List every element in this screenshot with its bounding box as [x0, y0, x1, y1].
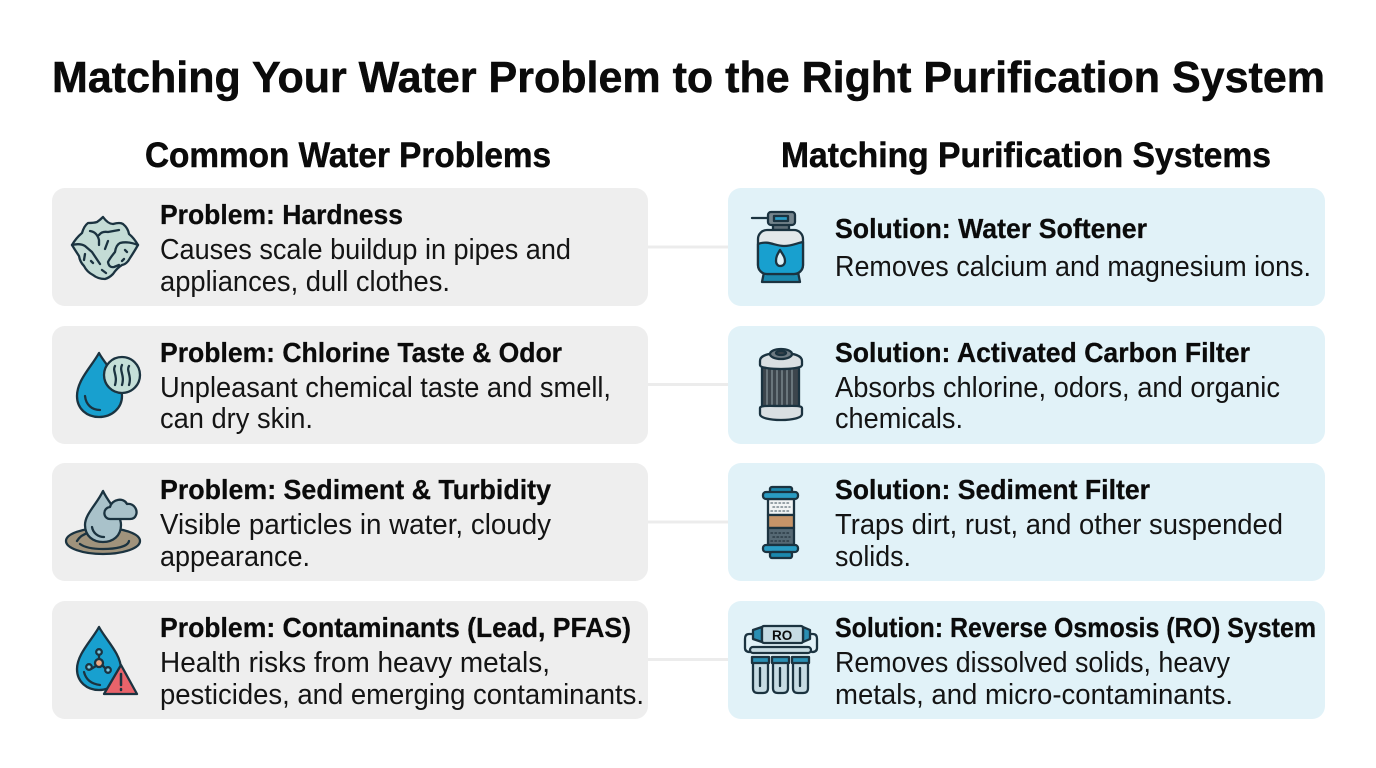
icon: mineral scale rock	[72, 217, 138, 279]
card text: water softener: Removes calcium and magnesium ions.	[835, 251, 1311, 283]
card text: sediment filter: Solution: Sediment Filter	[835, 474, 1150, 505]
card text: sediment	[160, 474, 552, 573]
card text: hardness	[160, 199, 571, 298]
card text: chlorine: can dry skin.	[160, 403, 313, 435]
heading: common water problems: Common Water Problems	[145, 136, 551, 175]
panel: contaminants problem	[52, 601, 648, 719]
card text: sediment: Visible particles in water, cloudy	[160, 509, 552, 541]
card text: contaminants	[160, 612, 644, 711]
panel: hardness problem	[52, 188, 648, 306]
card text: reverse osmosis	[835, 612, 1316, 711]
panel: sediment filter solution	[728, 463, 1325, 581]
card text: hardness: Causes scale buildup in pipes and	[160, 234, 571, 266]
card text: reverse osmosis: metals, and micro-contaminants.	[835, 679, 1233, 711]
heading: matching purification systems: Matching Purification Systems	[781, 136, 1271, 175]
panel: reverse osmosis solution	[728, 601, 1325, 719]
icon: carbon filter cartridge	[760, 349, 802, 420]
icon: water softener tank	[752, 212, 803, 282]
panel: sediment problem	[52, 463, 648, 581]
panel: chlorine problem	[52, 326, 648, 444]
card text: chlorine	[160, 337, 611, 435]
icon: sediment filter layers	[763, 487, 798, 558]
card text: contaminants: Health risks from heavy metals,	[160, 647, 550, 679]
icon: reverse osmosis unit: RO	[772, 628, 792, 643]
panel: activated carbon solution	[728, 326, 1325, 444]
card text: sediment: appearance.	[160, 541, 310, 573]
panel: water softener solution	[728, 188, 1325, 306]
card text: hardness: appliances, dull clothes.	[160, 266, 450, 298]
card text: activated carbon: chemicals.	[835, 403, 963, 435]
card text: sediment filter	[835, 474, 1283, 573]
card text: sediment filter: Traps dirt, rust, and other suspended	[835, 509, 1283, 541]
card text: contaminants: Problem: Contaminants (Lead, PFAS)	[160, 612, 631, 643]
card text: water softener: Solution: Water Softener	[835, 213, 1147, 244]
card text: water softener	[835, 213, 1311, 283]
card text: activated carbon	[835, 337, 1280, 435]
icon: reverse osmosis unit	[745, 626, 817, 693]
icon: water drop with odor	[77, 353, 140, 417]
card text: sediment filter: solids.	[835, 541, 911, 573]
card text: sediment: Problem: Sediment & Turbidity	[160, 474, 552, 505]
card text: activated carbon: Solution: Activated Carbon Filter	[835, 337, 1250, 368]
title: Matching Your Water Problem to the Right Purification System	[52, 53, 1325, 102]
card text: reverse osmosis: Removes dissolved solids, heavy	[835, 647, 1231, 679]
card text: activated carbon: Absorbs chlorine, odors, and organic	[835, 372, 1280, 404]
icon: contaminated drop with warning	[77, 627, 137, 694]
icon: cloudy drop in sediment puddle	[66, 491, 140, 554]
card text: reverse osmosis: Solution: Reverse Osmosis (RO) System	[835, 612, 1316, 643]
card text: hardness: Problem: Hardness	[160, 199, 403, 230]
card text: chlorine: Unpleasant chemical taste and smell,	[160, 372, 611, 404]
card text: chlorine: Problem: Chlorine Taste & Odor	[160, 337, 562, 368]
card text: contaminants: pesticides, and emerging contaminants.	[160, 679, 644, 711]
